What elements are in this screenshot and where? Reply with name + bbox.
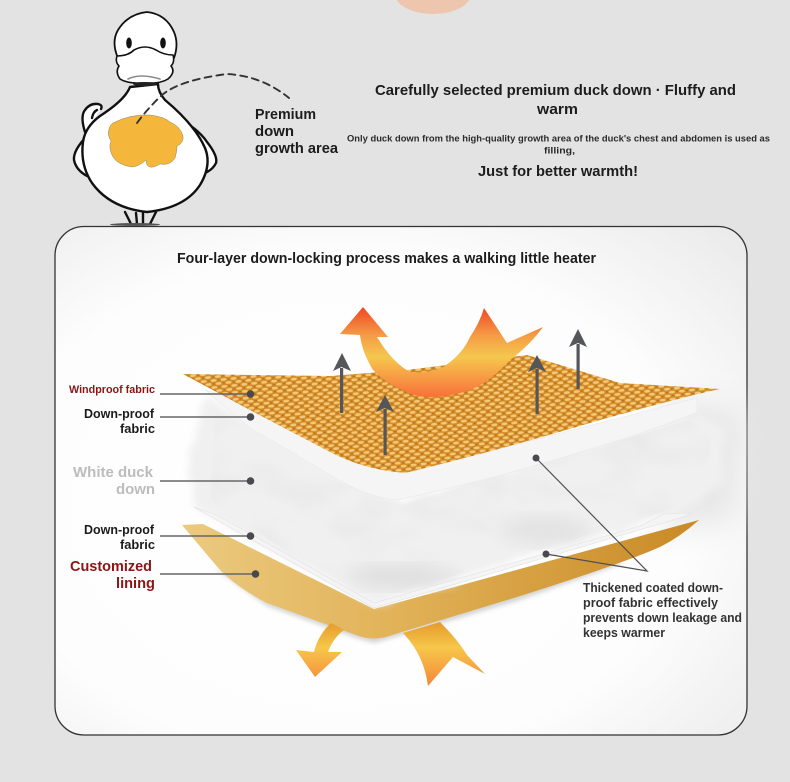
layer: lower down-proof fabric	[194, 507, 692, 608]
lining shadow	[214, 560, 624, 643]
text: premium down growth area: down	[255, 124, 294, 140]
text: premium down growth area: growth area	[255, 141, 339, 157]
growth area patch	[108, 115, 183, 167]
duck head	[114, 12, 176, 58]
pink shape at top edge	[395, 0, 471, 14]
arrow: heat curved	[340, 307, 543, 397]
heading: premium duck down: Carefully selected premium duck down · Fluffy and	[375, 82, 736, 99]
duck eyes	[126, 38, 132, 48]
callout: thickened fabric: proof fabric effectively	[583, 596, 718, 610]
icon: duck	[74, 12, 289, 226]
label: down-proof fabric upper	[84, 406, 254, 436]
panel title: Four-layer down-locking process makes a walking little heater	[177, 251, 596, 267]
text: premium down growth area	[255, 107, 339, 157]
label: customized lining	[70, 558, 259, 592]
text: description	[347, 134, 770, 156]
text: description: filling,	[544, 146, 575, 156]
label: down-proof fabric lower	[84, 522, 254, 552]
arrow: up 3	[528, 355, 546, 414]
dashed pointer	[137, 74, 289, 123]
arrow: up 2	[376, 395, 394, 455]
callout: thickened fabric	[532, 454, 742, 640]
duck body	[82, 84, 208, 212]
text: premium down growth area: Premium	[255, 107, 316, 123]
label: down-proof fabric upper: fabric	[120, 421, 155, 436]
callout: thickened fabric: keeps warmer	[583, 626, 665, 640]
text: just for better warmth: Just for better warmth!	[478, 164, 638, 180]
callout: thickened fabric: Thickened coated down-	[583, 581, 723, 595]
label: customized lining: Customized	[70, 558, 152, 575]
label: windproof fabric	[69, 384, 254, 398]
label: white duck down: down	[116, 481, 155, 498]
shadow behind layers	[660, 400, 745, 530]
heading: premium duck down	[375, 82, 736, 118]
duck right wing	[170, 113, 216, 172]
layered fabric illustration	[182, 307, 745, 686]
label: windproof fabric: Windproof fabric	[69, 384, 155, 396]
label: down-proof fabric lower: fabric	[120, 537, 155, 552]
callout: thickened fabric: prevents down leakage and	[583, 611, 742, 625]
heading: premium duck down: warm	[536, 101, 578, 118]
label: white duck down: White duck	[73, 464, 154, 481]
arrow: up 4	[569, 329, 587, 389]
arrow: up 1	[333, 353, 351, 413]
label: customized lining: lining	[116, 575, 155, 592]
layer: upper down-proof fabric	[205, 390, 697, 500]
duck feet	[125, 212, 156, 224]
duck bill	[116, 47, 174, 83]
label: white duck down	[73, 464, 254, 498]
arrow: lower left	[296, 623, 344, 677]
panel: four-layer process	[55, 226, 747, 735]
layer: white duck down	[190, 395, 728, 604]
layer: customized lining	[182, 520, 699, 638]
label: down-proof fabric upper: Down-proof	[84, 406, 155, 421]
duck tail	[82, 104, 102, 132]
duck left wing	[74, 135, 88, 176]
arrow: lower right	[403, 622, 485, 686]
label: down-proof fabric lower: Down-proof	[84, 522, 155, 537]
layer: windproof mesh fabric	[183, 355, 720, 473]
text: description: Only duck down from the high-quality growth area of the duck's chest and abdomen is used as	[347, 134, 770, 144]
